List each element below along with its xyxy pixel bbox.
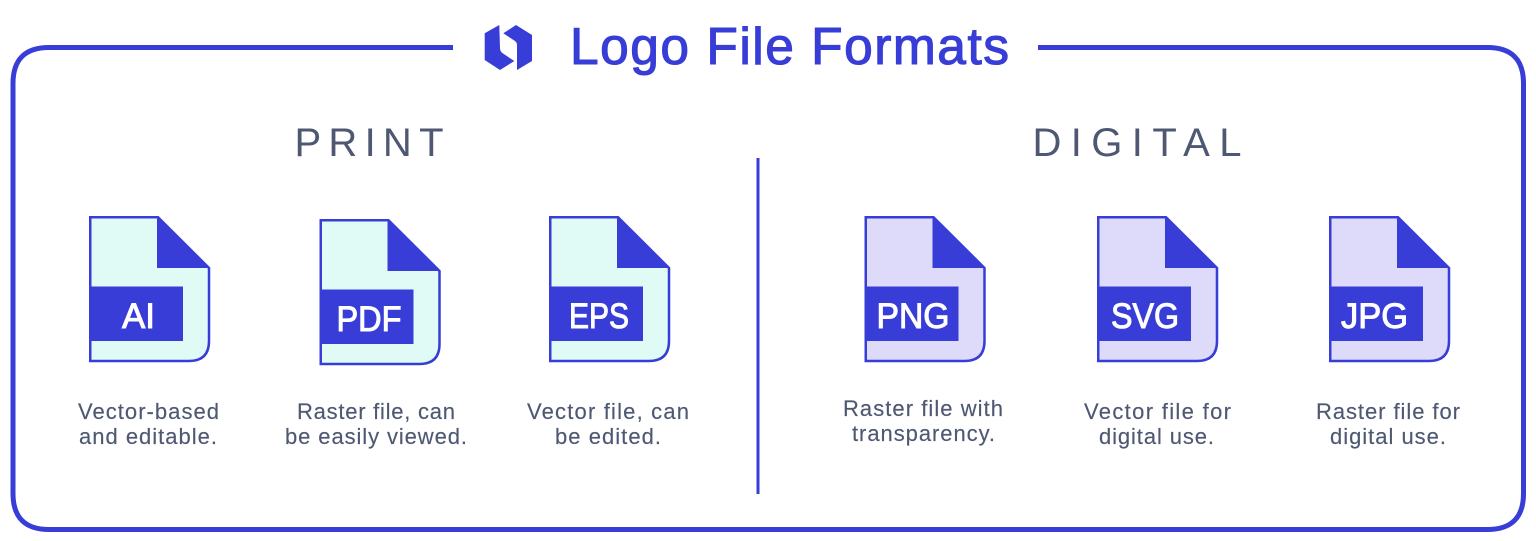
description: PNG: transparency. [852,421,995,446]
divider between print and digital [756,158,760,494]
description: AI [78,399,219,449]
description: PDF [285,399,467,449]
file icon: PNG: PNG [876,297,950,336]
icon: logo mark [485,25,532,70]
description: EPS [527,399,689,449]
description: PDF: be easily viewed. [285,424,467,449]
description: EPS: be edited. [555,424,661,449]
description: AI: Vector-based [78,399,219,424]
file icon: JPG: JPG [1341,297,1408,336]
description: AI: and editable. [79,424,217,449]
description: PDF: Raster file, can [297,399,455,424]
description: SVG: Vector file for [1084,399,1231,424]
file icon: JPG [1330,217,1449,361]
description: JPG [1316,399,1460,449]
description: PNG [843,396,1003,446]
description: JPG: Raster file for [1316,399,1460,424]
file icon: PNG [866,217,984,361]
heading: print: PRINT [294,121,444,165]
file icon: AI: AI [122,297,155,336]
file icon: SVG [1098,217,1217,361]
description: SVG [1084,399,1231,449]
file icon: PDF [320,220,440,364]
description: SVG: digital use. [1099,424,1214,449]
file icon: EPS [550,217,669,361]
file icon: EPS: EPS [569,297,629,336]
title: Logo File Formats [570,17,1009,75]
file icon: PDF: PDF [336,300,402,339]
description: PNG: Raster file with [843,396,1003,421]
file icon: AI [90,217,209,361]
heading: digital: DIGITAL [1032,121,1242,165]
file icon: SVG: SVG [1111,297,1179,336]
description: JPG: digital use. [1330,424,1446,449]
description: EPS: Vector file, can [527,399,689,424]
